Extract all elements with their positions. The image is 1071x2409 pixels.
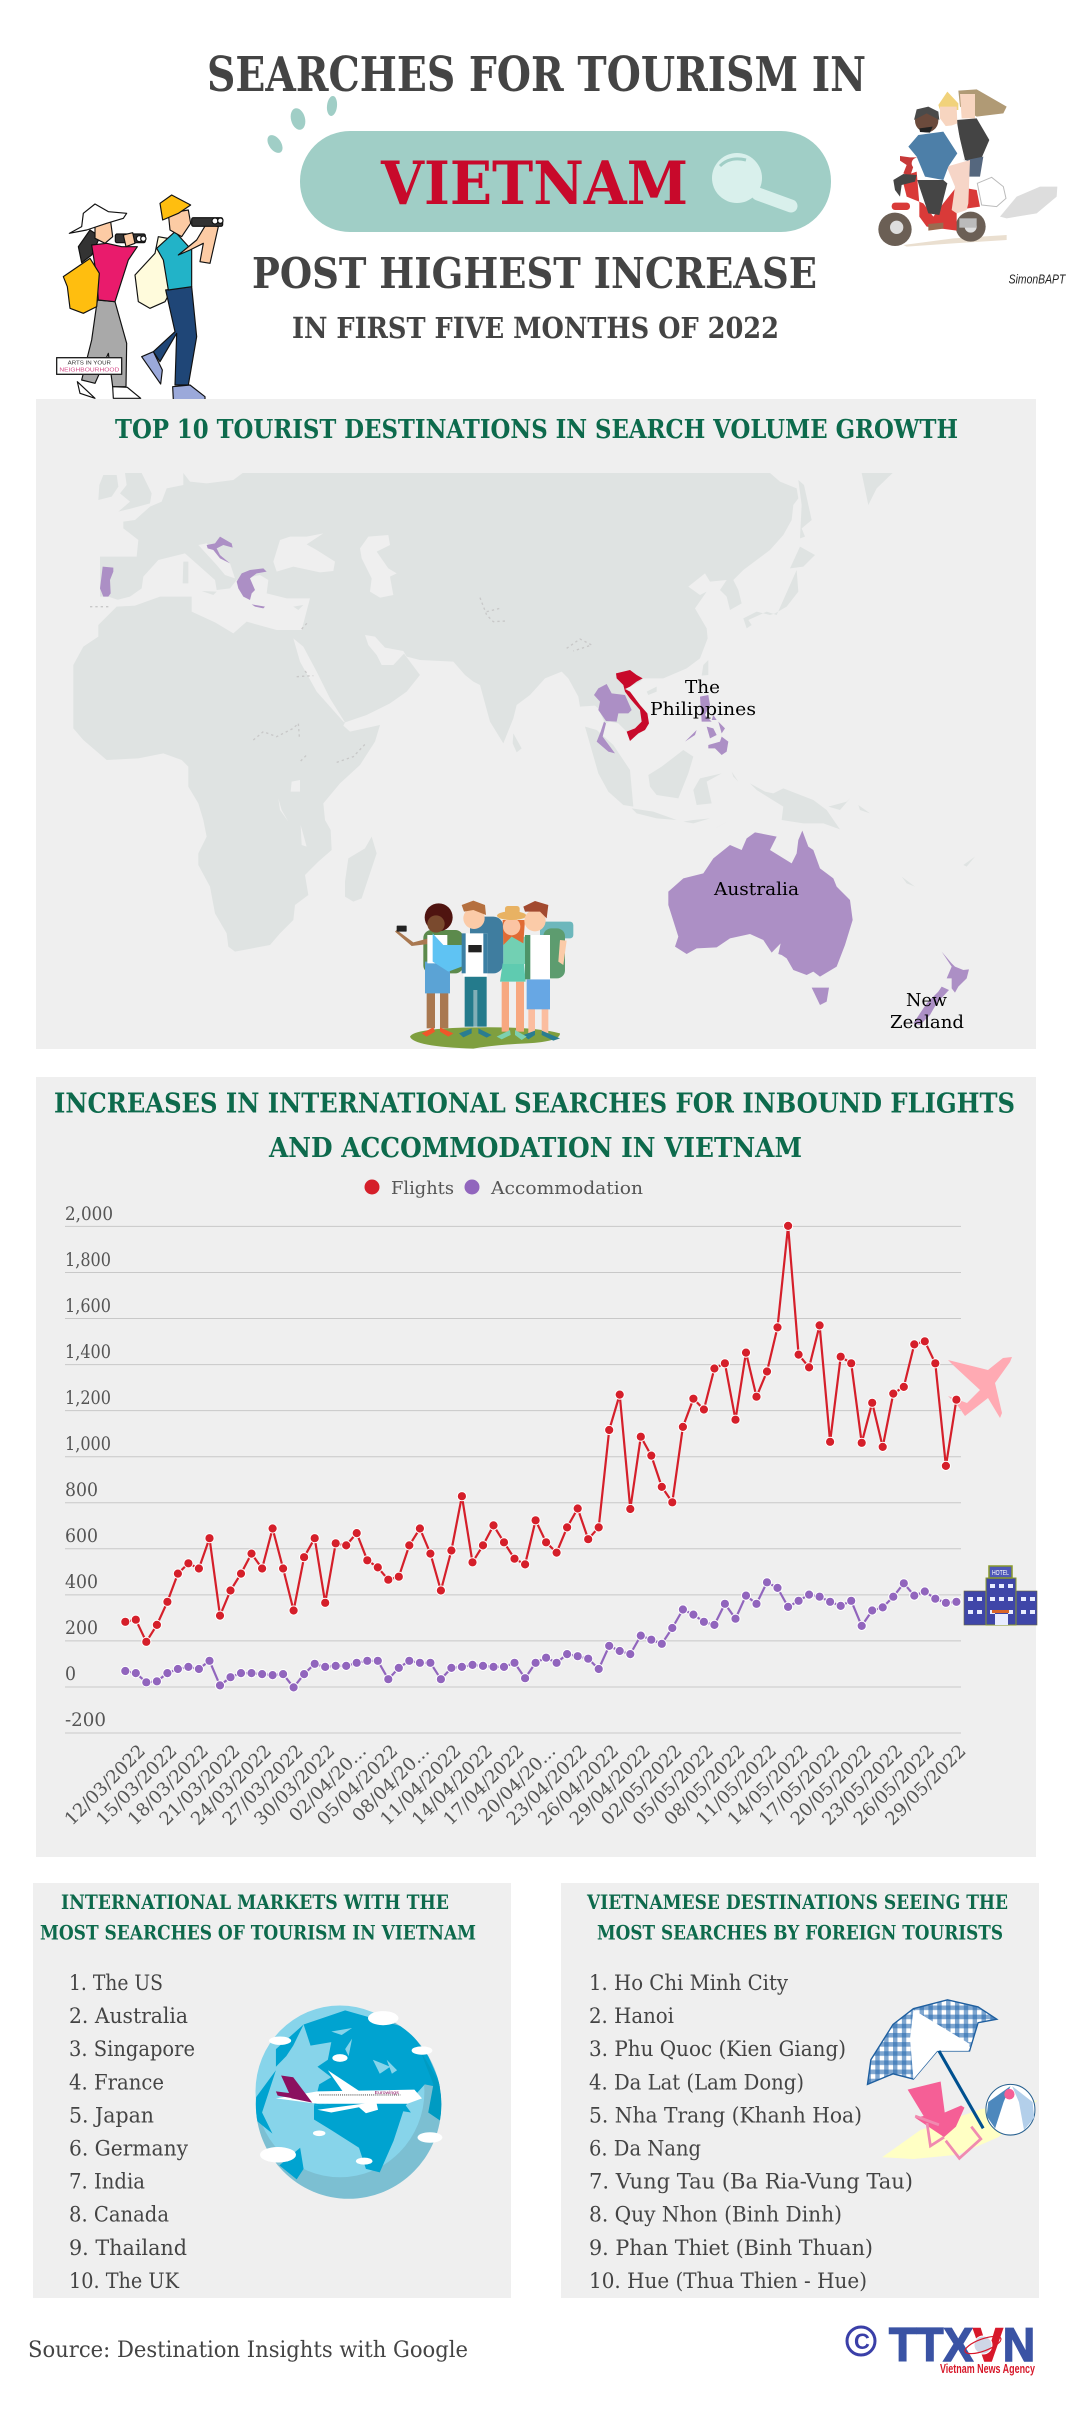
x axis date labels: 02/04/20... xyxy=(285,1741,371,1826)
heading: Vietnamese destinations: MOST SEARCHES BY FOREIGN TOURISTS xyxy=(597,1922,1003,1944)
y axis labels: 200 xyxy=(65,1617,98,1639)
ranked list: destinations: 2. Hanoi xyxy=(589,2004,674,2028)
ranked list: destinations: 10. Hue (Thua Thien - Hue) xyxy=(589,2269,867,2293)
ranked list: markets: 1. The US xyxy=(69,1971,163,1995)
x axis date labels: 02/05/2022 xyxy=(597,1741,686,1830)
y axis labels: 1,800 xyxy=(65,1249,111,1271)
label: New Zealand: New xyxy=(906,990,948,1011)
y axis labels: 1,000 xyxy=(65,1433,111,1455)
x axis date labels: 30/03/2022 xyxy=(250,1741,339,1830)
source note: Source: Destination Insights with Google xyxy=(28,2338,468,2363)
world map xyxy=(73,473,975,1025)
country: Philippines xyxy=(685,695,728,755)
y axis grid xyxy=(65,1226,961,1733)
label: The Philippines: Philippines xyxy=(650,699,756,720)
chart legend xyxy=(364,1178,643,1199)
country: Vietnam xyxy=(616,670,649,741)
x axis date labels: 11/04/2022 xyxy=(376,1741,465,1830)
y axis labels: 1,400 xyxy=(65,1341,111,1363)
panel: Vietnamese destinations xyxy=(561,1883,1039,2298)
heading: Vietnam: VIETNAM xyxy=(380,149,688,219)
ranked list: destinations xyxy=(589,1971,913,2293)
x axis date labels: 20/05/2022 xyxy=(787,1741,876,1830)
title line: post highest increase: POST HIGHEST INCREASE xyxy=(252,249,817,298)
ranked list: markets xyxy=(69,1971,195,2293)
y axis labels: 600 xyxy=(65,1525,98,1547)
x axis date labels: 05/04/2022 xyxy=(313,1741,402,1830)
ranked list: destinations: 4. Da Lat (Lam Dong) xyxy=(589,2070,804,2094)
ranked list: destinations: 7. Vung Tau (Ba Ria-Vung Tau) xyxy=(589,2170,913,2194)
logo: TTXVN Vietnam News Agency: Vietnam News Agency xyxy=(940,2362,1035,2376)
x axis date labels: 26/05/2022 xyxy=(850,1741,939,1830)
x axis date labels: 24/03/2022 xyxy=(187,1741,276,1830)
x axis date labels: 18/03/2022 xyxy=(124,1741,213,1830)
ranked list: markets: 3. Singapore xyxy=(69,2037,195,2061)
x axis date labels: 15/03/2022 xyxy=(92,1741,181,1830)
label: The Philippines xyxy=(650,677,756,720)
x axis date labels xyxy=(61,1741,970,1830)
x axis date labels: 17/05/2022 xyxy=(755,1741,844,1830)
country: Croatia xyxy=(207,537,233,563)
signboard: arts in your neighbourhood: ARTS IN YOUR xyxy=(68,361,111,367)
ranked list: markets: 9. Thailand xyxy=(69,2236,187,2260)
y axis labels xyxy=(65,1203,113,1731)
label: New Zealand: Zealand xyxy=(890,1012,964,1033)
ranked list: destinations: 3. Phu Quoc (Kien Giang) xyxy=(589,2037,846,2061)
heading: international markets: MOST SEARCHES OF TOURISM IN VIETNAM xyxy=(40,1922,476,1944)
x axis date labels: 21/03/2022 xyxy=(155,1741,245,1830)
heading: increases in international searches xyxy=(54,1088,1015,1164)
icon: pink airplane xyxy=(948,1357,1012,1418)
series: accommodation xyxy=(125,1582,956,1687)
x axis date labels: 11/05/2022 xyxy=(692,1741,781,1830)
country: Australia xyxy=(668,831,853,977)
dashed river traces xyxy=(90,598,592,762)
title line: searches for tourism in: SEARCHES FOR TOURISM IN xyxy=(207,47,866,103)
x axis date labels: 29/04/2022 xyxy=(566,1741,655,1830)
chart legend: Flights xyxy=(391,1178,454,1199)
x axis date labels: 12/03/2022 xyxy=(61,1741,150,1830)
line chart xyxy=(61,1203,1037,1830)
illustration: three riders on red scooter xyxy=(878,89,1066,286)
illustration: two tourists with binoculars xyxy=(57,195,223,400)
country: Portugal xyxy=(100,567,113,597)
x axis date labels: 14/04/2022 xyxy=(408,1741,497,1830)
country: Greece xyxy=(237,568,267,608)
heading: international markets xyxy=(40,1891,476,1944)
icon: magnifier xyxy=(712,153,791,206)
heading: international markets: INTERNATIONAL MARKETS WITH THE xyxy=(61,1891,449,1914)
ranked list: markets: 7. India xyxy=(69,2170,145,2194)
y axis labels: 0 xyxy=(65,1663,76,1685)
x axis date labels: 14/05/2022 xyxy=(724,1741,813,1830)
x axis date labels: 05/05/2022 xyxy=(629,1741,718,1830)
label: New Zealand xyxy=(890,990,964,1033)
ranked list: markets: 2. Australia xyxy=(69,2004,188,2028)
airline wordmark: Eurowings xyxy=(375,2090,399,2096)
y axis labels: -200 xyxy=(65,1709,106,1731)
label: Australia: Australia xyxy=(713,879,799,900)
ranked list: markets: 8. Canada xyxy=(69,2203,169,2227)
panel: line chart of searches xyxy=(36,1077,1037,1857)
seas and lakes cut into land xyxy=(117,533,397,847)
illustration: globe with airplane xyxy=(255,2005,444,2199)
y axis labels: 1,200 xyxy=(65,1387,111,1409)
icon: hotel building: HOTEL xyxy=(992,1570,1009,1577)
panel: map of top 10 destinations xyxy=(36,399,1036,1049)
series: flights xyxy=(125,1226,956,1642)
heading: increases in international searches: AND ACCOMMODATION IN VIETNAM xyxy=(268,1133,802,1164)
x axis date labels: 20/04/20... xyxy=(475,1741,560,1826)
chart legend: Accommodation xyxy=(490,1178,643,1199)
title line: in first five months of 2022: IN FIRST FIVE MONTHS OF 2022 xyxy=(292,311,779,345)
y axis labels: 2,000 xyxy=(65,1203,113,1225)
illustration: beach umbrella, chair and ball xyxy=(867,2000,1038,2159)
logo: TTXVN Vietnam News Agency: TTXVN xyxy=(889,2318,1035,2371)
ranked list: destinations: 6. Da Nang xyxy=(589,2136,701,2160)
country: New Zealand xyxy=(913,952,969,1025)
islands xyxy=(98,473,975,902)
ranked list: destinations: 9. Phan Thiet (Binh Thuan) xyxy=(589,2236,873,2260)
illustration: group of backpackers xyxy=(395,901,573,1049)
icon: search sparks xyxy=(264,96,338,156)
search pill xyxy=(300,131,831,232)
icon: hotel building xyxy=(964,1566,1037,1625)
header xyxy=(57,47,1066,400)
logo: TTXVN Vietnam News Agency: C xyxy=(854,2329,870,2354)
signboard: arts in your neighbourhood xyxy=(57,358,122,374)
y axis labels: 400 xyxy=(65,1571,98,1593)
landmass: Eurasia and Africa xyxy=(73,473,798,952)
heading: Vietnamese destinations xyxy=(586,1891,1008,1944)
ranked list: destinations: 1. Ho Chi Minh City xyxy=(589,1971,788,1995)
heading: top 10 tourist destinations: TOP 10 TOURIST DESTINATIONS IN SEARCH VOLUME GROWTH xyxy=(115,415,958,445)
ranked list: destinations: 8. Quy Nhon (Binh Dinh) xyxy=(589,2203,842,2227)
ranked list: markets: 5. Japan xyxy=(69,2103,154,2127)
x axis date labels: 27/03/2022 xyxy=(219,1741,308,1830)
x axis date labels: 17/04/2022 xyxy=(439,1741,529,1830)
signboard: arts in your neighbourhood: NEIGHBOURHOOD xyxy=(59,368,119,374)
x axis date labels: 08/05/2022 xyxy=(660,1741,749,1830)
heading: Vietnamese destinations: VIETNAMESE DESTINATIONS SEEING THE xyxy=(586,1891,1008,1914)
y axis labels: 800 xyxy=(65,1479,98,1501)
label: The Philippines: The xyxy=(685,677,720,698)
country: Tasmania xyxy=(812,988,829,1005)
ranked list: markets: 10. The UK xyxy=(69,2269,179,2293)
country: Thailand xyxy=(594,684,632,753)
ranked list: markets: 4. France xyxy=(69,2070,164,2094)
ranked list: destinations: 5. Nha Trang (Khanh Hoa) xyxy=(589,2103,862,2127)
panel: international markets xyxy=(33,1883,511,2298)
x axis date labels: 29/05/2022 xyxy=(881,1741,970,1830)
x axis date labels: 08/04/20... xyxy=(348,1741,434,1826)
x axis date labels: 23/05/2022 xyxy=(818,1741,907,1830)
y axis labels: 1,600 xyxy=(65,1295,111,1317)
x axis date labels: 26/04/2022 xyxy=(534,1741,623,1830)
ranked list: markets: 6. Germany xyxy=(69,2136,188,2160)
x axis date labels: 23/04/2022 xyxy=(503,1741,592,1830)
